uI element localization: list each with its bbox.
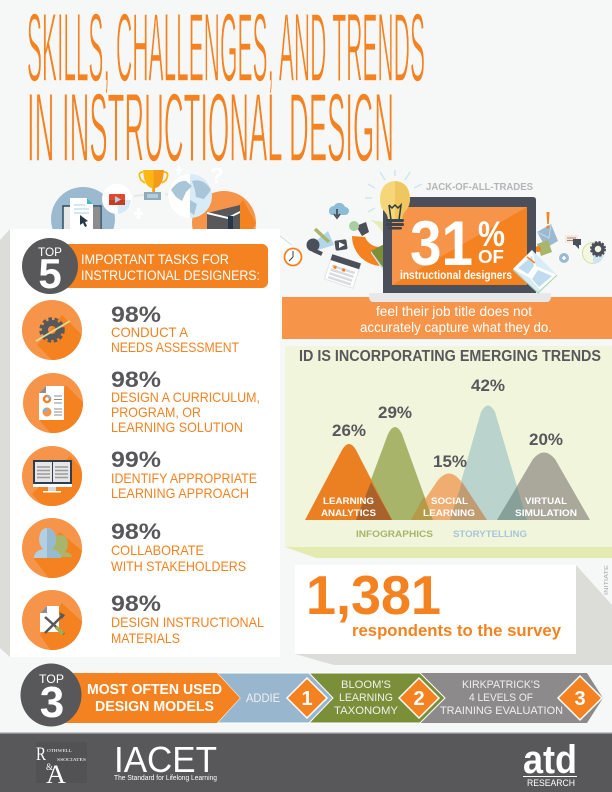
arrow: addie: 1 xyxy=(301,688,313,710)
arrow: addie xyxy=(217,673,333,723)
icon: gear and pencil xyxy=(22,300,82,360)
callout: laptop 31 percent: 31 xyxy=(410,209,473,279)
panel: top 5 tasks xyxy=(0,229,280,670)
callout: laptop 31 percent xyxy=(369,197,551,302)
arrow: kirkpatrick: 3 xyxy=(574,688,586,710)
labels: trend names on mountains: LEARNING xyxy=(323,496,374,507)
heading: important tasks banner: TOP xyxy=(38,247,62,259)
panel: survey respondents xyxy=(295,564,612,665)
labels: trend names below mountains: INFOGRAPHICS xyxy=(356,529,433,540)
arrow: kirkpatrick xyxy=(420,673,603,723)
heading: important tasks banner: INSTRUCTIONAL DESIGNERS: xyxy=(81,268,260,283)
badge: top 3: 3 xyxy=(40,678,64,727)
heading: important tasks banner: IMPORTANT TASKS FOR xyxy=(81,252,229,267)
panel: emerging trends xyxy=(285,346,612,558)
arrow: addie: ADDIE xyxy=(246,693,280,705)
panel: survey respondents: 1,381 xyxy=(306,564,441,626)
arrow: most often used: MOST OFTEN USED xyxy=(87,682,222,698)
text: conduct a needs assessment: CONDUCT A xyxy=(111,324,189,340)
text: design instructional materials xyxy=(111,591,264,646)
arrow: kirkpatrick: 4 LEVELS OF xyxy=(469,692,533,704)
icon: document with tools xyxy=(22,590,82,650)
illustration: education icons above task panel: ? xyxy=(210,163,224,188)
arrow: most often used xyxy=(60,673,240,723)
labels: trend names on mountains: SIMULATION xyxy=(515,508,577,519)
icon: light bulb xyxy=(365,170,422,230)
text: design instructional materials: MATERIALS xyxy=(111,630,180,646)
arrow: most often used: DESIGN MODELS xyxy=(95,699,214,715)
text: identify appropriate learning approach: IDENTIFY APPROPRIATE xyxy=(111,470,257,486)
logo: atd research: atd xyxy=(523,738,577,782)
text: design instructional materials: 98% xyxy=(111,591,161,616)
illustration: education icons above task panel xyxy=(51,163,256,255)
text: design a curriculum: DESIGN A CURRICULUM, xyxy=(111,389,260,405)
labels: trend percentages: 26% xyxy=(332,422,366,440)
labels: trend percentages: 42% xyxy=(471,377,505,395)
badge: top 3 xyxy=(20,664,82,727)
icon: computer with open book xyxy=(22,446,82,506)
labels: trend names below mountains: STORYTELLING xyxy=(453,529,527,540)
logo: rothwell and associates: OTHWELL xyxy=(47,748,73,753)
title xyxy=(27,0,425,182)
text: identify appropriate learning approach xyxy=(111,447,257,501)
logo: rothwell and associates xyxy=(36,742,87,789)
text: identify appropriate learning approach: LEARNING APPROACH xyxy=(111,485,249,501)
arrow: bloom's taxonomy: LEARNING xyxy=(339,692,393,704)
band: job title statement: feel their job title does not xyxy=(376,303,532,319)
footer xyxy=(0,732,612,792)
illustration: office icons left of laptop xyxy=(280,203,404,288)
icon: open book on laptop xyxy=(513,250,557,293)
band: job title statement xyxy=(282,297,612,339)
logo: rothwell and associates: R xyxy=(36,744,46,765)
text: design a curriculum xyxy=(111,367,260,435)
text: design a curriculum: 98% xyxy=(111,367,161,392)
text: conduct a needs assessment: NEEDS ASSESSMENT xyxy=(111,339,239,355)
arrow: bloom's taxonomy: BLOOM'S xyxy=(341,679,391,691)
text: identify appropriate learning approach: 99% xyxy=(111,447,161,472)
arrow: kirkpatrick: KIRKPATRICK'S xyxy=(462,679,540,691)
callout: laptop 31 percent: instructional designers xyxy=(400,270,512,282)
illustration: office icons right of laptop xyxy=(535,212,605,264)
labels: trend percentages xyxy=(332,377,563,471)
text: collaborate with stakeholders: WITH STAKEHOLDERS xyxy=(111,558,246,574)
banner: top 3 design models xyxy=(20,664,603,727)
labels: trend names on mountains xyxy=(321,496,577,519)
heading: important tasks banner: 5 xyxy=(38,250,62,297)
text: design a curriculum: LEARNING SOLUTION xyxy=(111,419,243,435)
band: job title statement: accurately capture what they do. xyxy=(360,319,552,335)
badge: top 3: TOP xyxy=(39,674,64,686)
labels: trend names on mountains: VIRTUAL xyxy=(525,496,567,507)
text: design instructional materials: DESIGN INSTRUCTIONAL xyxy=(111,614,264,630)
arrow: bloom's taxonomy: TAXONOMY xyxy=(334,705,399,717)
small vertical credit: INITIATE xyxy=(604,564,610,595)
callout: laptop 31 percent: OF xyxy=(478,247,504,267)
labels: trend names on mountains: SOCIAL xyxy=(431,496,468,507)
logo: iacet: IACET xyxy=(114,739,217,780)
logo: rothwell and associates: & xyxy=(46,762,53,772)
labels: trend percentages: 29% xyxy=(378,404,412,422)
arrow: kirkpatrick: TRAINING EVALUATION xyxy=(440,705,563,717)
text: conduct a needs assessment: 98% xyxy=(111,302,161,327)
logo: rothwell and associates: SSOCIATES xyxy=(57,757,86,762)
arrow: bloom's taxonomy: 2 xyxy=(413,688,425,710)
labels: trend names on mountains: ANALYTICS xyxy=(321,508,376,519)
panel: survey respondents: respondents to the survey xyxy=(352,621,562,640)
text: collaborate with stakeholders: 98% xyxy=(111,519,161,544)
labels: trend percentages: 20% xyxy=(529,431,563,449)
logo: rothwell and associates: A xyxy=(46,760,66,789)
logo: iacet: The Standard for Lifelong Learning xyxy=(114,775,217,782)
label: jack of all trades: JACK-OF-ALL-TRADES xyxy=(426,181,533,193)
chart: trend mountains xyxy=(305,406,590,520)
labels: trend names on mountains: LEARNING xyxy=(423,508,475,519)
text: collaborate with stakeholders: COLLABORATE xyxy=(111,542,204,558)
heading: important tasks banner xyxy=(22,238,268,297)
arrow: bloom's taxonomy xyxy=(309,673,445,723)
icon: curriculum document xyxy=(23,373,83,433)
callout: laptop 31 percent: % xyxy=(478,215,505,254)
text: design a curriculum: PROGRAM, OR xyxy=(111,404,201,420)
text: conduct a needs assessment xyxy=(111,302,239,355)
icon: two people xyxy=(22,518,82,578)
text: collaborate with stakeholders xyxy=(111,519,246,574)
labels: trend names below mountains xyxy=(356,529,527,540)
labels: trend percentages: 15% xyxy=(433,453,467,471)
logo: atd research: RESEARCH xyxy=(527,778,575,788)
